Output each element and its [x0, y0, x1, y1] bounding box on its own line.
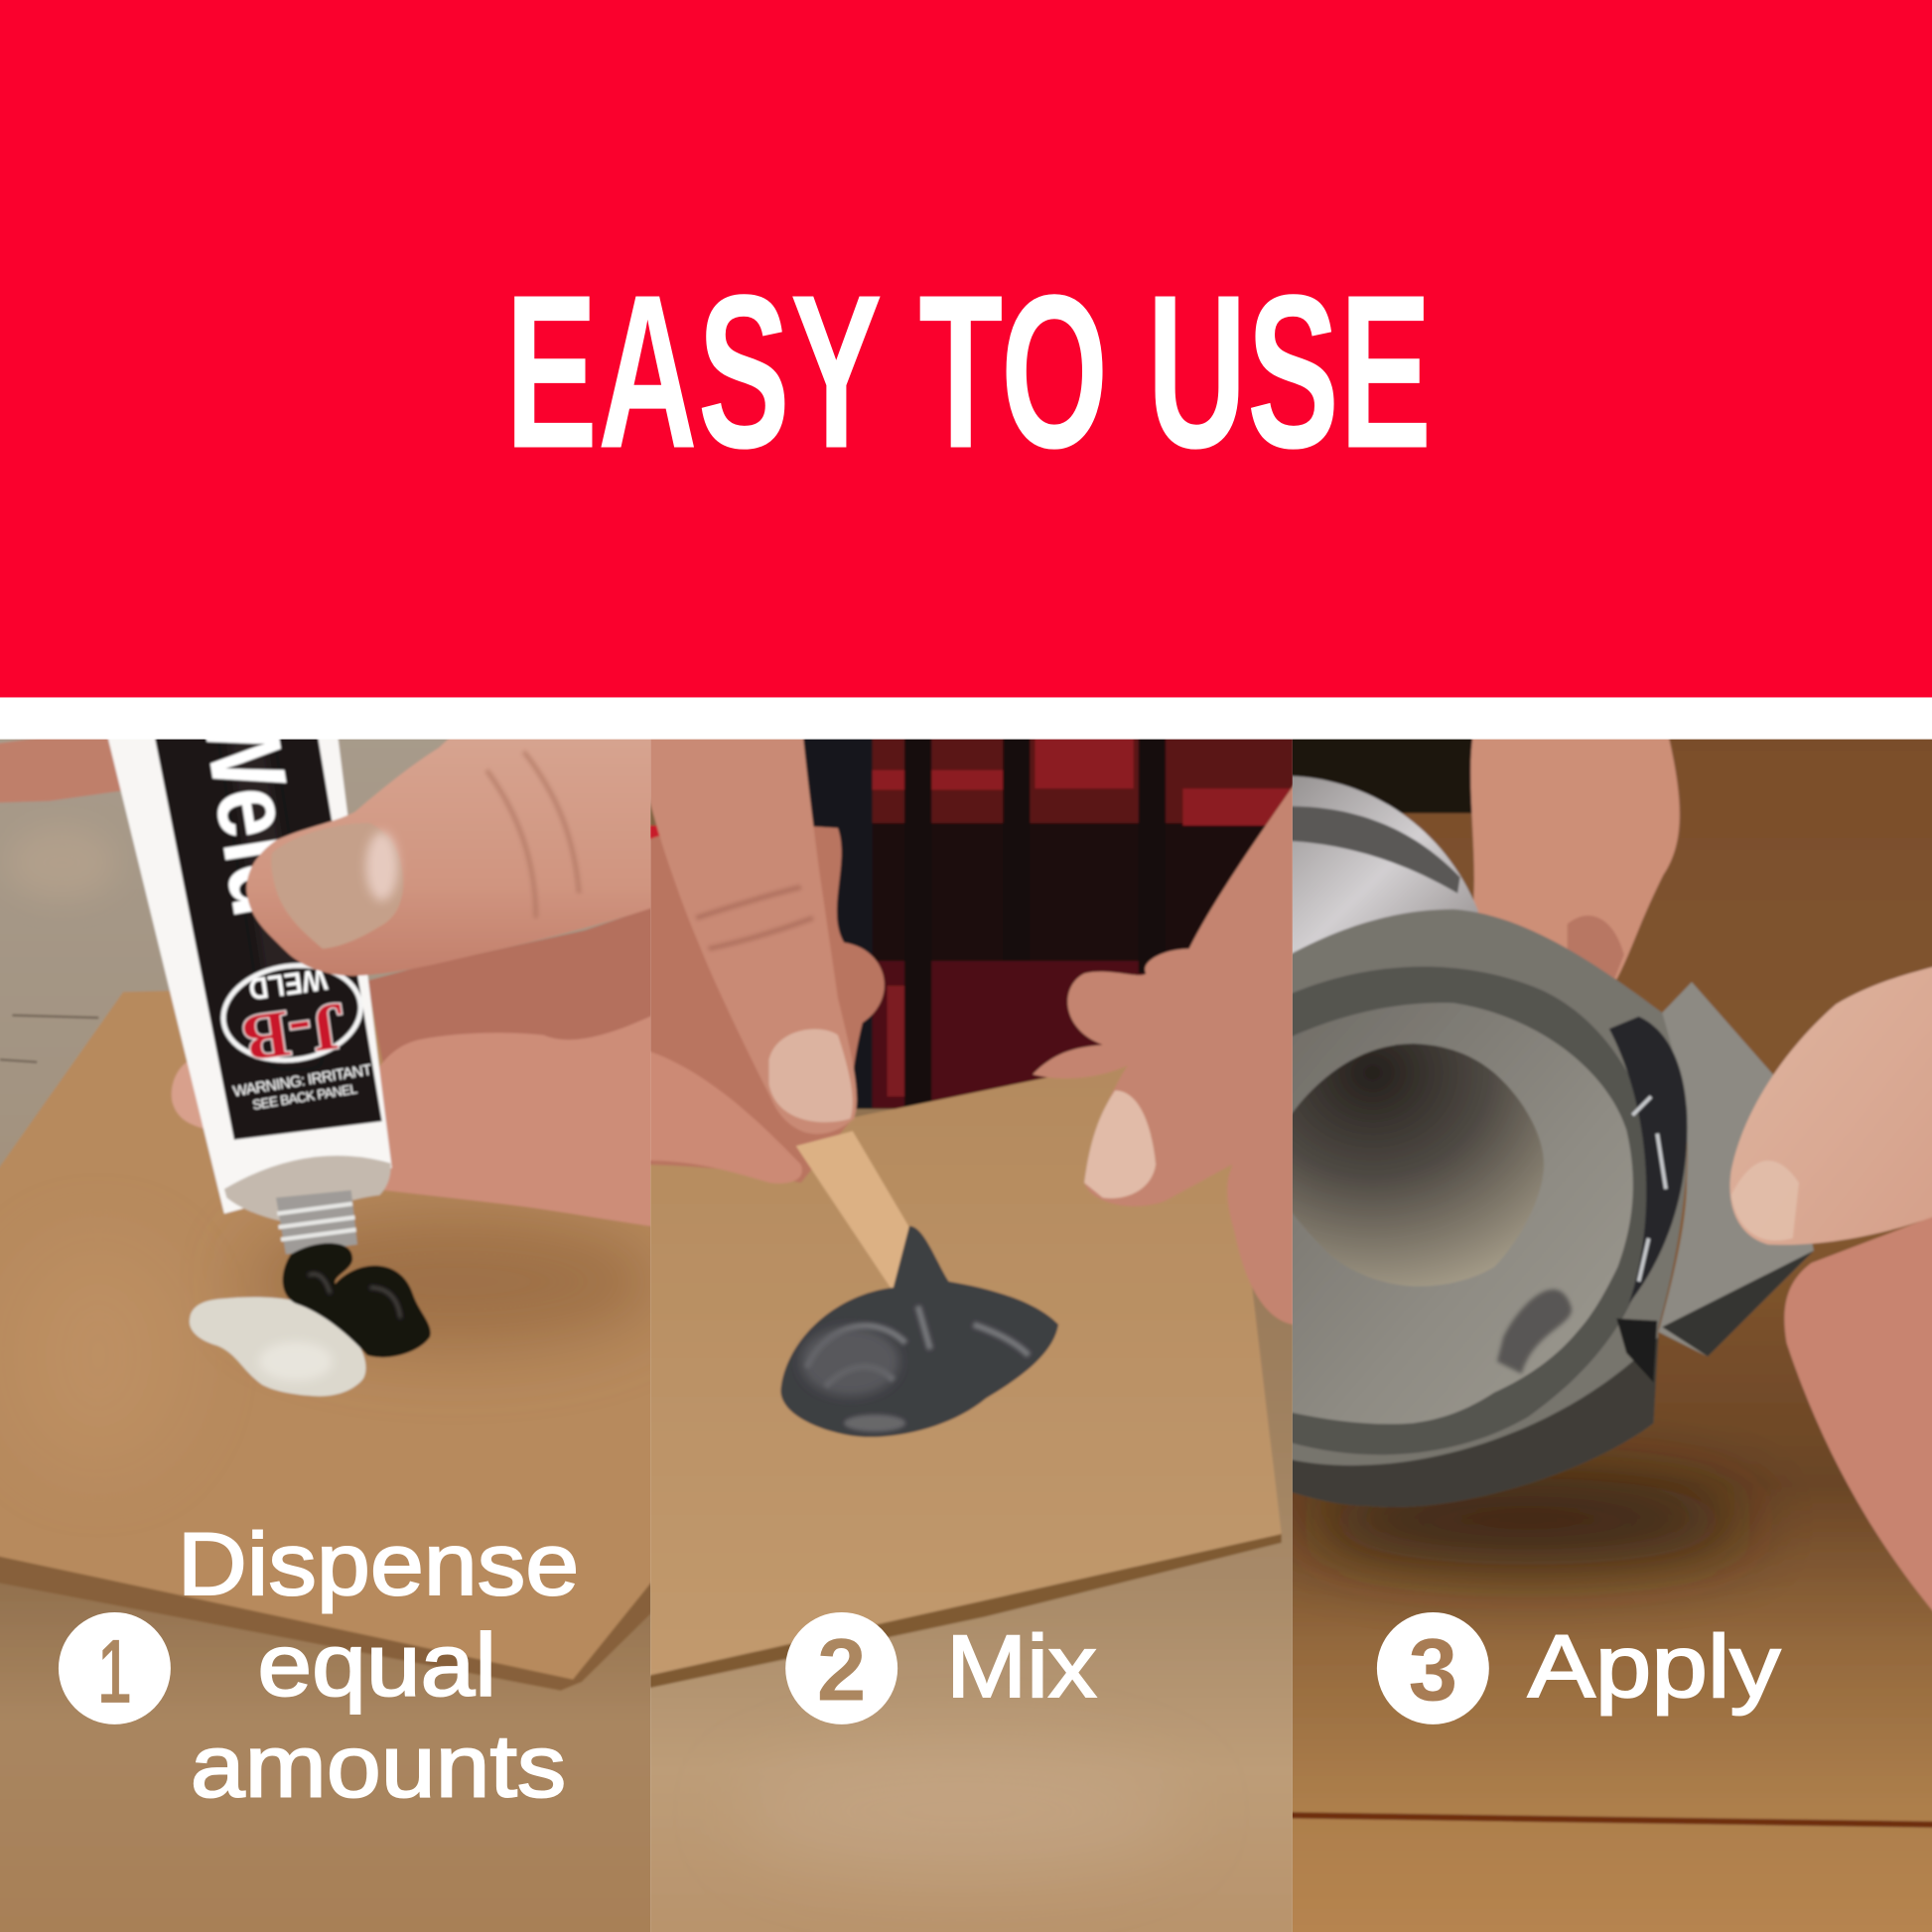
number badge 3: [1377, 1612, 1489, 1725]
cardboard sheet: [625, 1059, 1282, 1693]
number badge 1: [59, 1612, 171, 1725]
pinching finger: [650, 739, 859, 1134]
white glue blob: [190, 1297, 365, 1396]
right hand: [1031, 784, 1293, 1325]
lower left hand: [625, 824, 885, 1183]
epoxy smudge: [1497, 1290, 1572, 1374]
warning text: WARNING: IRRITANT: [231, 1061, 373, 1100]
tube nozzle: [276, 1190, 357, 1254]
tube brand text: Weld: [180, 696, 328, 924]
step 2 caption: [785, 1612, 1097, 1725]
outer flange: [1293, 908, 1688, 1467]
step 1 label: equal: [257, 1615, 496, 1715]
thumb: [244, 739, 651, 978]
number badge 3: 3: [1409, 1620, 1457, 1720]
inner bowl: [1268, 1003, 1633, 1424]
panel: step 3 apply: [1268, 715, 1932, 1932]
black glue blob: [283, 1243, 431, 1357]
right fingertip: [1730, 961, 1932, 1245]
title: EASY TO USE: [505, 249, 1432, 494]
step 1 label: Dispense: [178, 1514, 579, 1613]
panel: step 2 mix: [625, 715, 1317, 1932]
warning text: SEE BACK PANEL: [251, 1081, 358, 1113]
step 1 caption: [59, 1514, 579, 1815]
panel: step 1 dispense: [0, 696, 675, 1932]
step 1 label: amounts: [191, 1716, 566, 1815]
J-B logo: [218, 961, 364, 1064]
number badge 1: 1: [97, 1621, 132, 1721]
number badge 2: [785, 1612, 897, 1725]
wood crack: [1268, 1815, 1932, 1825]
number badge 2: 2: [817, 1620, 867, 1720]
cardboard sheet: [0, 986, 675, 1691]
wooden mixing stick: [795, 1130, 909, 1289]
glued joint: [1609, 1017, 1688, 1304]
WELD wordmark: WELD: [246, 961, 330, 1007]
glue tube: [102, 696, 392, 1254]
thumb behind pipe: [1470, 715, 1680, 980]
lower right hand: [1784, 1207, 1932, 1639]
plaid shirt: [650, 739, 1293, 1110]
step 3 caption: [1377, 1612, 1781, 1725]
metal pipe fitting: [1268, 775, 1814, 1507]
broken metal tab: [1658, 982, 1814, 1356]
step 2 label: Mix: [946, 1616, 1097, 1716]
step 1 label: [178, 1514, 579, 1815]
step 3 label: Apply: [1528, 1616, 1781, 1716]
hand behind tube: [0, 727, 675, 1230]
gray mixed epoxy: [780, 1226, 1058, 1437]
J-B red mark: J-B: [238, 989, 351, 1075]
center bore: [1268, 1043, 1544, 1287]
